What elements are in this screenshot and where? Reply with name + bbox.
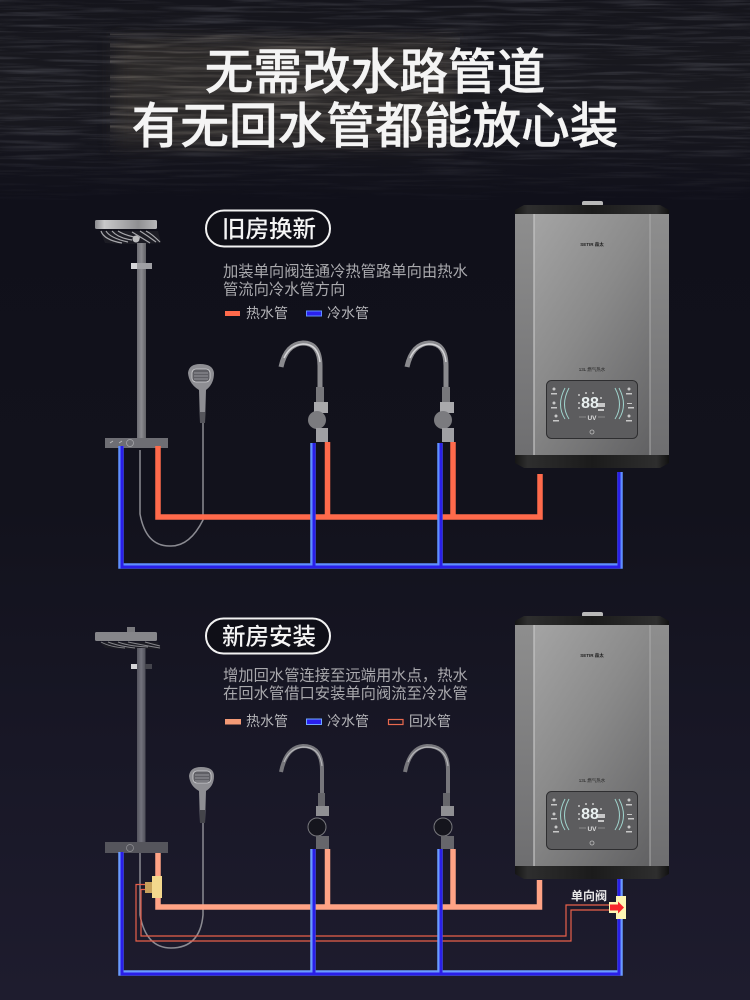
- return water pipes: [136, 884, 612, 941]
- description text: 管流向冷水管方向: [223, 282, 345, 298]
- shower column: [95, 220, 168, 448]
- legend: 热水管: [246, 713, 288, 729]
- description text: 在回水管借口安装单向阀流至冷水管: [223, 686, 468, 702]
- check valve label: 单向阀: [571, 888, 607, 903]
- faucet 2: [405, 746, 454, 849]
- cold water pipes: [121, 849, 620, 974]
- hot water pipes: [158, 849, 540, 907]
- legend: 冷水管: [327, 305, 369, 321]
- legend: 回水管: [409, 713, 451, 729]
- title: 无需改水路管道: [205, 46, 545, 100]
- check valve with arrow: [609, 896, 626, 919]
- legend: [225, 713, 451, 729]
- cold water pipes: [121, 443, 620, 567]
- description text: [223, 668, 468, 702]
- description text: [223, 264, 468, 298]
- title: 有无回水管都能放心装: [132, 100, 618, 154]
- heading pill: 旧房换新: [206, 210, 330, 246]
- description text: 加装单向阀连通冷热管路单向由热水: [223, 264, 468, 280]
- brass tee fitting: [145, 876, 162, 898]
- title: [132, 46, 618, 154]
- shower column: [95, 627, 168, 853]
- hand shower and hose: [140, 364, 214, 546]
- faucet 2: [407, 343, 454, 442]
- panel: old house renovation: [95, 201, 669, 567]
- description text: 增加回水管连接至远端用水点，热水: [223, 668, 468, 684]
- panel: new house installation: [95, 612, 669, 974]
- faucet 1: [281, 343, 328, 442]
- legend: 冷水管: [327, 713, 369, 729]
- heading pill: 旧房换新: 旧房换新: [222, 216, 316, 242]
- heading pill: 新房安装: 新房安装: [222, 624, 316, 650]
- water heater: [515, 612, 669, 879]
- faucet 1: [281, 746, 329, 849]
- legend: [225, 305, 369, 321]
- hand shower and hose: [140, 767, 214, 948]
- heading pill: 新房安装: [206, 618, 330, 654]
- hot water pipes: [158, 442, 540, 517]
- legend: 热水管: [246, 305, 288, 321]
- water heater: [515, 201, 669, 468]
